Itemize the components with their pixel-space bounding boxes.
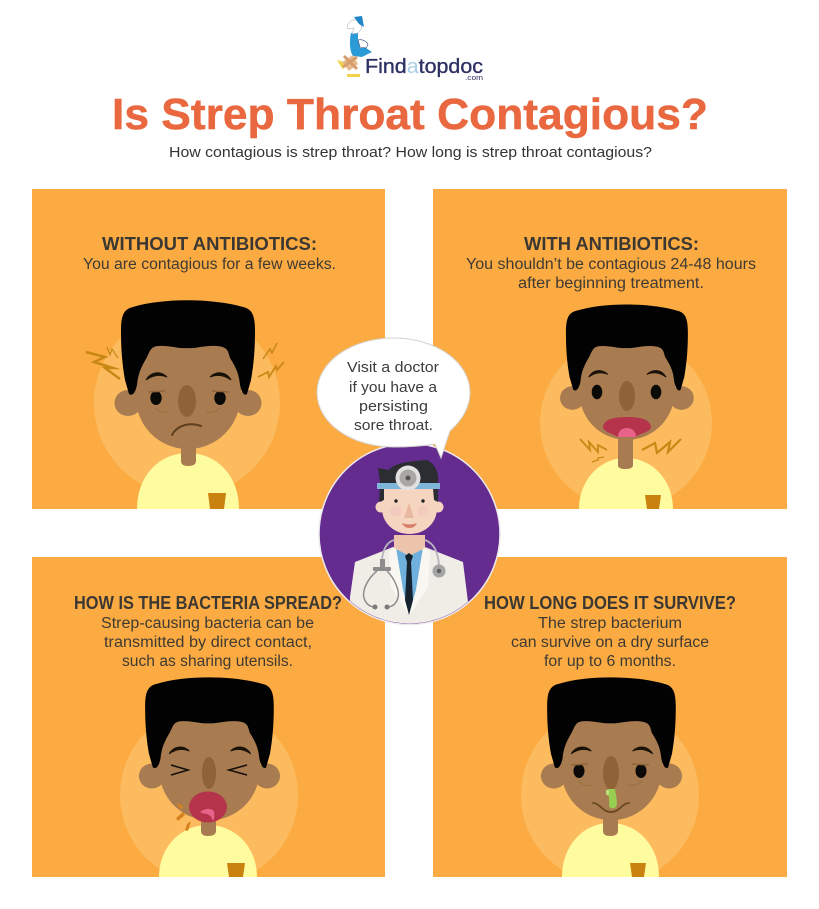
illustration: boy coughing (120, 677, 298, 884)
heading: without antibiotics: WITHOUT ANTIBIOTICS: (102, 234, 317, 254)
speech bubble (317, 338, 470, 458)
panel: with antibiotics (433, 189, 787, 509)
heading: with antibiotics: WITH ANTIBIOTICS: (524, 234, 699, 254)
text: survival duration (511, 615, 709, 670)
title: Is Strep Throat Contagious? (112, 90, 708, 139)
bubble text: if you have a (349, 379, 438, 396)
text: transmission: Strep-causing bacteria can be (101, 615, 314, 632)
bubble text: sore throat. (354, 417, 433, 434)
panel: without antibiotics (32, 189, 385, 509)
text: contagious time with treatment: after beginning treatment. (518, 275, 704, 292)
heading: survival: HOW LONG DOES IT SURVIVE? (484, 593, 736, 613)
text: transmission: transmitted by direct contact, (104, 634, 312, 651)
text: survival duration: can survive on a dry surface (511, 634, 709, 651)
text: transmission (101, 615, 314, 670)
bubble text (347, 359, 439, 434)
panel: how is the bacteria spread (32, 557, 385, 884)
illustration: doctor (350, 460, 468, 630)
illustration: boy with sore throat (540, 304, 712, 509)
text: contagious time with treatment: You shouldn’t be contagious 24-48 hours (466, 256, 756, 273)
bubble text: Visit a doctor (347, 359, 439, 376)
doctor badge (319, 444, 500, 630)
wordmark suffix: .com (465, 73, 483, 82)
bubble text: persisting (359, 398, 428, 415)
subtitle: How contagious is strep throat? How long is strep throat contagious? (169, 144, 652, 161)
icon: duck mascot (337, 16, 372, 77)
text: survival duration: for up to 6 months. (544, 653, 676, 670)
wordmark: Findatopdoc (365, 55, 483, 78)
text: contagious for weeks: You are contagious for a few weeks. (83, 256, 336, 273)
heading: bacteria spread: HOW IS THE BACTERIA SPREAD? (74, 593, 342, 613)
logo (337, 16, 483, 82)
text: survival duration: The strep bacterium (538, 615, 682, 632)
text: transmission: such as sharing utensils. (122, 653, 293, 670)
illustration: boy with runny nose (521, 677, 699, 884)
panel: how long does it survive (433, 557, 787, 884)
text: contagious time with treatment (466, 256, 756, 292)
illustration: boy with headache (86, 300, 284, 509)
